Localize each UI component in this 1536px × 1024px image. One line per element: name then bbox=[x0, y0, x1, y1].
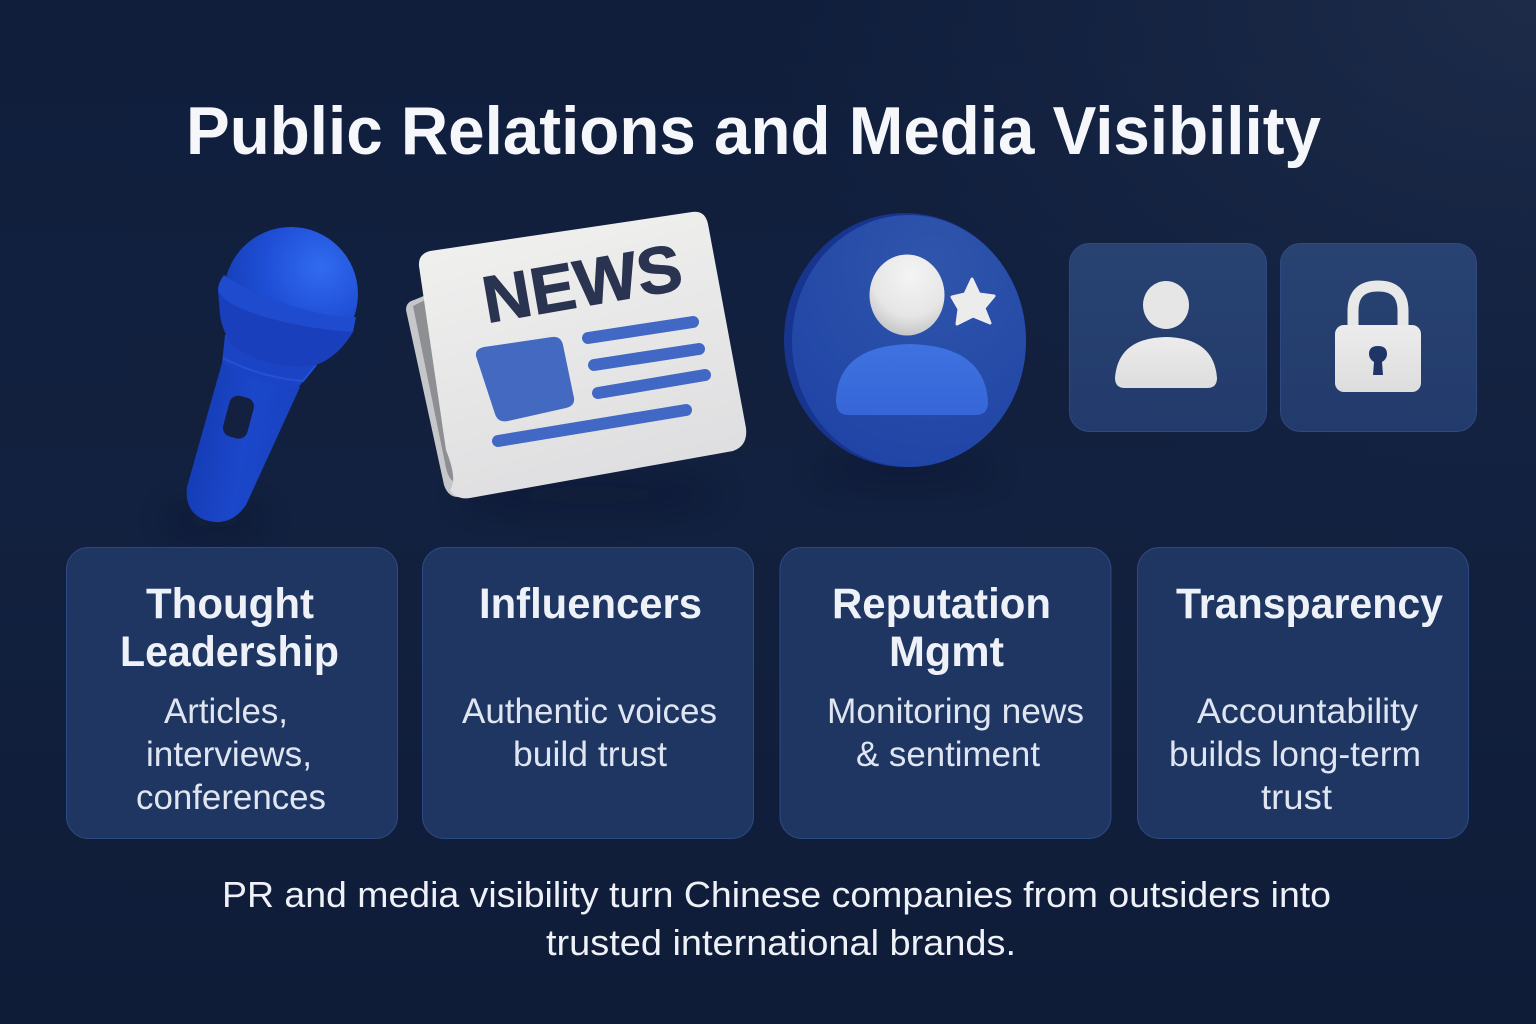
panel: influencers bbox=[422, 548, 754, 838]
description bbox=[462, 692, 717, 774]
heading: Mgmt bbox=[889, 628, 1004, 676]
description bbox=[1169, 692, 1421, 817]
panel: transparency bbox=[1138, 548, 1468, 838]
heading: Reputation bbox=[832, 580, 1051, 628]
panel: thought leadership bbox=[66, 548, 398, 838]
heading: Influencers bbox=[479, 580, 702, 628]
description bbox=[136, 692, 326, 817]
footer statement bbox=[222, 874, 1331, 963]
description: & sentiment bbox=[856, 735, 1040, 774]
description: Monitoring news bbox=[827, 692, 1084, 731]
headline: NEWS bbox=[477, 230, 687, 337]
description: conferences bbox=[136, 778, 326, 817]
title: Public Relations and Media Visibility bbox=[186, 93, 1321, 169]
panel: reputation management bbox=[780, 548, 1111, 838]
heading: Leadership bbox=[120, 628, 339, 676]
description: Authentic voices bbox=[462, 692, 717, 731]
icon: reputation badge bbox=[784, 213, 1026, 480]
heading: Transparency bbox=[1176, 580, 1443, 628]
footer statement: PR and media visibility turn Chinese companies from outsiders into bbox=[222, 874, 1331, 915]
icon: newspaper bbox=[406, 212, 746, 507]
description: interviews, bbox=[146, 735, 312, 774]
heading bbox=[120, 580, 339, 676]
description bbox=[827, 692, 1084, 774]
icon: lock tile bbox=[1280, 244, 1476, 432]
description: Accountability bbox=[1197, 692, 1419, 731]
news lines bbox=[498, 322, 705, 441]
description: build trust bbox=[513, 735, 667, 774]
icon: microphone bbox=[165, 227, 358, 532]
heading: Thought bbox=[146, 580, 314, 628]
description: builds long-term bbox=[1169, 735, 1421, 774]
description: trust bbox=[1261, 778, 1332, 817]
description: Articles, bbox=[164, 692, 288, 731]
footer statement: trusted international brands. bbox=[546, 922, 1016, 963]
heading bbox=[832, 580, 1051, 676]
icon: person tile bbox=[1070, 244, 1266, 432]
news image bbox=[476, 337, 574, 421]
